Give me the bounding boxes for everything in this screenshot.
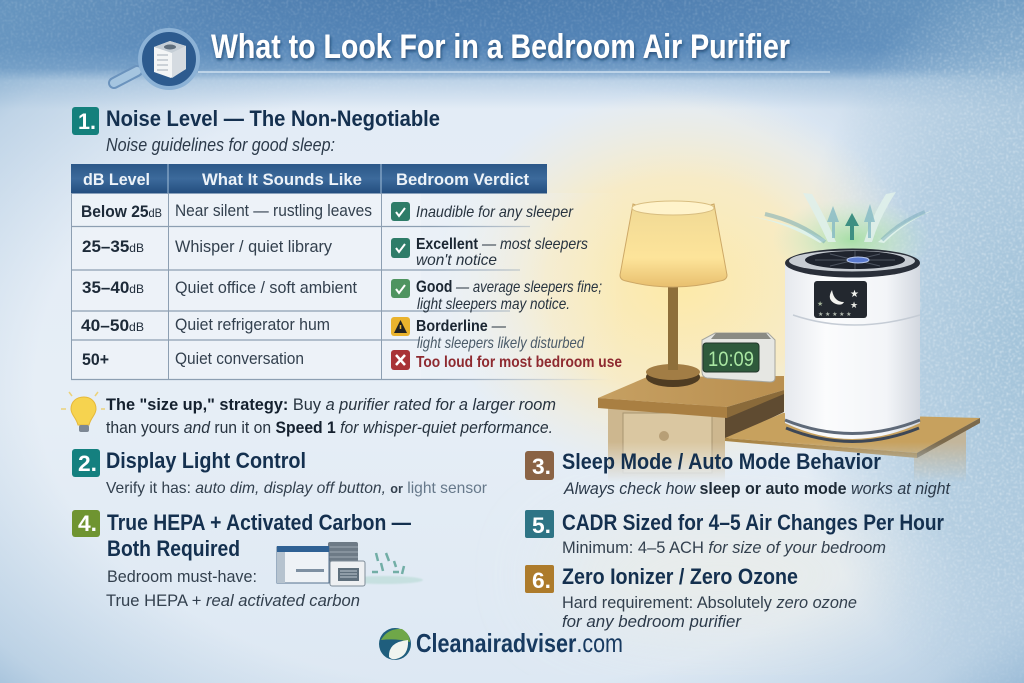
row: 25-35 dB: won't notice — [416, 252, 497, 269]
row: 35-40 dB: 35–40dB — [82, 278, 144, 297]
section 2: display light control: Display Light Control — [106, 448, 306, 473]
row: below 25 dB — [81, 201, 574, 221]
section 4: true HEPA: Both Required — [107, 536, 240, 561]
display panel: ★ — [817, 300, 823, 308]
table header: dB Level — [83, 170, 150, 189]
title: What to Look For in a Bedroom Air Purifier — [211, 28, 790, 66]
icon: light bulb — [61, 392, 105, 432]
section 6: zero ozone: Zero Ionizer / Zero Ozone — [562, 564, 798, 589]
row: below 25 dB: Below 25dB — [81, 202, 162, 221]
section 6: zero ozone: Hard requirement: Absolutely zero ozone — [562, 593, 857, 612]
row: 25-35 dB — [82, 236, 588, 269]
icon: leaf globe — [379, 628, 411, 660]
section 4: true HEPA: Bedroom must-have: — [107, 567, 257, 586]
row: 40-50 dB — [81, 315, 585, 352]
section 4: true HEPA: 4. — [78, 511, 97, 536]
tip: size up strategy: The "size up," strategy: Buy a purifier rated for a larger room — [106, 395, 556, 414]
row: 25-35 dB: 25–35dB — [82, 237, 144, 256]
icon: magnifying glass with purifier — [114, 30, 198, 88]
section 3: sleep mode — [525, 449, 951, 498]
table header: Bedroom Verdict — [396, 170, 529, 189]
section 6: zero ozone: 6. — [532, 568, 551, 593]
row: 35-40 dB: Quiet office / soft ambient — [175, 278, 357, 297]
illustration: bedside scene — [598, 192, 980, 490]
row: 50+: Quiet conversation — [175, 349, 304, 368]
display panel — [814, 281, 867, 318]
purifier — [785, 248, 920, 442]
section 1: noise level — [71, 106, 625, 380]
section 3: sleep mode: Sleep Mode / Auto Mode Behavior — [562, 449, 881, 474]
display panel: ★ ★ ★ ★ ★ — [818, 311, 852, 318]
row: 40-50 dB: light sleepers likely disturbed — [417, 335, 585, 352]
nightstand — [598, 376, 784, 490]
icon: filters — [277, 542, 423, 586]
alarm clock: 10:09 — [708, 348, 754, 371]
display panel: ★ — [850, 300, 858, 310]
section 2: display light control — [72, 448, 488, 497]
row: 40-50 dB: Borderline — — [416, 318, 507, 335]
section 5: CADR — [525, 510, 944, 557]
row: 35-40 dB: light sleepers may notice. — [417, 296, 570, 313]
row: 50+: Too loud for most bedroom use — [416, 354, 622, 371]
section 4: true HEPA: True HEPA + real activated carbon — [106, 591, 360, 610]
section 3: sleep mode: Always check how sleep or auto mode works at night — [563, 479, 951, 498]
row: 35-40 dB: Good — average sleepers fine; — [416, 277, 602, 296]
lamp — [620, 201, 727, 387]
row: below 25 dB: Near silent — rustling leaves — [175, 201, 372, 220]
section 5: CADR: 5. — [532, 513, 551, 538]
airflow arrows — [748, 192, 934, 282]
tip: size up strategy: than yours and run it on Speed 1 for whisper-quiet performance. — [106, 418, 553, 437]
row: 50+ — [82, 349, 622, 371]
noise table — [71, 164, 625, 380]
badge 1 — [72, 107, 99, 135]
table header — [71, 164, 547, 194]
table background — [71, 193, 625, 380]
section 6: zero ozone — [525, 564, 857, 631]
row: 25-35 dB: Excellent — most sleepers — [416, 236, 588, 253]
alarm clock — [702, 333, 775, 382]
row: 25-35 dB: Whisper / quiet library — [175, 237, 332, 256]
section 5: CADR: Minimum: 4–5 ACH for size of your bedroom — [562, 538, 886, 557]
subheading: Noise guidelines for good sleep: — [106, 135, 335, 155]
badge 1: 1. — [78, 109, 96, 134]
section 3: sleep mode: 3. — [532, 454, 551, 479]
purifier stand — [725, 413, 980, 482]
section 2: display light control: 2. — [78, 451, 97, 476]
display panel: ★ — [850, 289, 859, 300]
row: 50+: 50+ — [82, 350, 109, 369]
section 4: true HEPA — [72, 510, 423, 610]
section 6: zero ozone: for any bedroom purifier — [562, 612, 742, 631]
row: below 25 dB: Inaudible for any sleeper — [416, 204, 574, 221]
section 4: true HEPA: True HEPA + Activated Carbon — — [107, 510, 411, 535]
row: 40-50 dB: Quiet refrigerator hum — [175, 315, 330, 334]
logo: Cleanairadviser.com: Cleanairadviser.com — [416, 628, 623, 658]
section 5: CADR: CADR Sized for 4–5 Air Changes Per Hour — [562, 510, 944, 535]
row: 40-50 dB: 40–50dB — [81, 316, 144, 335]
heading 1: Noise Level — The Non-Negotiable — [106, 106, 440, 131]
section 2: display light control: Verify it has: auto dim, display off button, or light sensor — [106, 480, 488, 497]
table header: What It Sounds Like — [202, 170, 362, 189]
row: 35-40 dB — [82, 277, 602, 313]
tip: size up strategy — [61, 392, 556, 437]
